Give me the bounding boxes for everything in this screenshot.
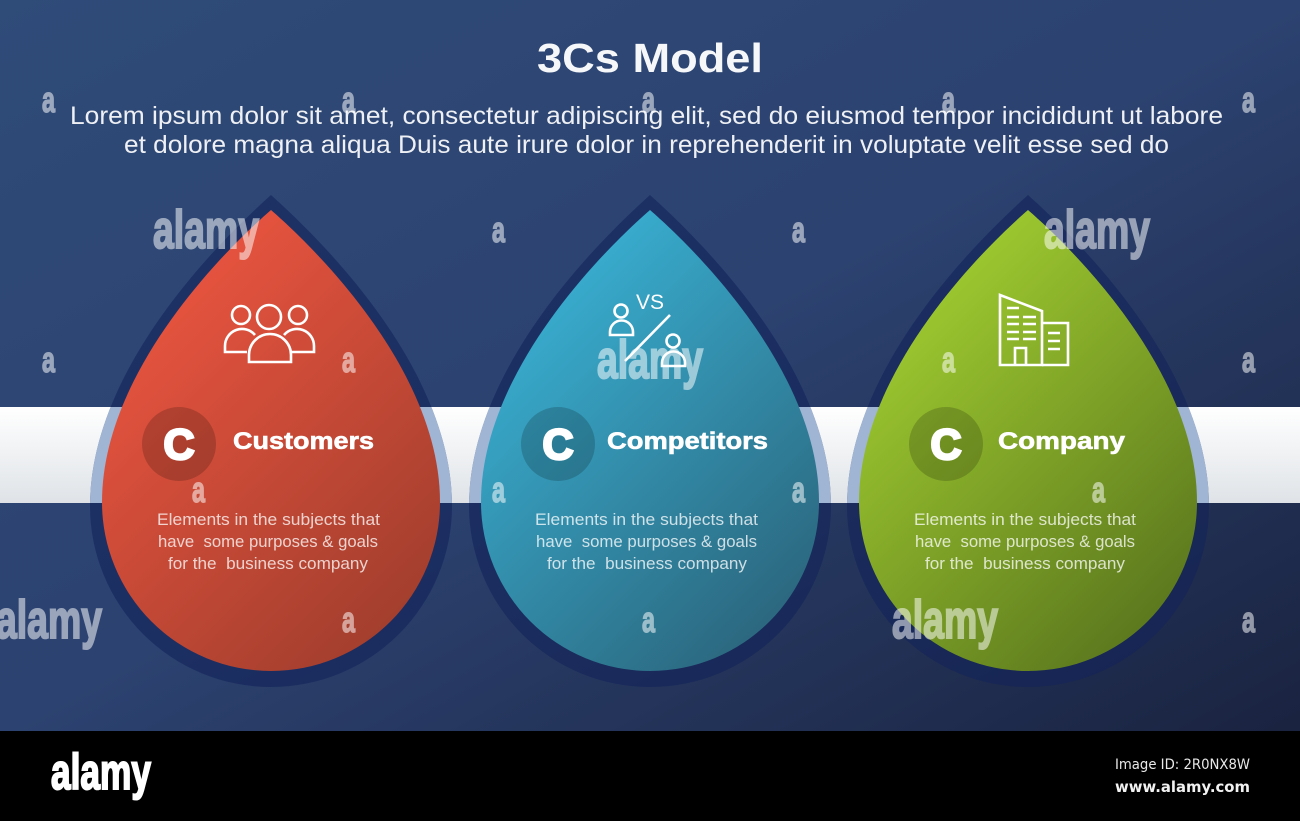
customers description: Elements in the subjects that xyxy=(157,510,380,529)
customers description: have some purposes & goals xyxy=(158,532,378,551)
competitors badge: C xyxy=(542,421,574,469)
footer logo: alamy xyxy=(51,744,151,800)
customers drop xyxy=(102,210,440,671)
customers description: for the business company xyxy=(168,554,368,573)
watermarks: a xyxy=(1092,469,1106,510)
customers label: Customers xyxy=(233,428,374,455)
icon: versus: VS xyxy=(636,291,664,314)
company description xyxy=(914,510,1136,573)
watermarks: a xyxy=(1242,79,1256,120)
competitors description: have some purposes & goals xyxy=(536,532,757,551)
competitors description xyxy=(535,510,758,573)
company label: Company xyxy=(998,428,1126,455)
watermarks: a xyxy=(42,339,56,380)
horizontal white band xyxy=(0,407,1300,503)
watermarks: a xyxy=(492,209,506,250)
competitors ring over band xyxy=(469,407,831,503)
competitors drop outer ring xyxy=(469,195,831,687)
watermarks: a xyxy=(42,79,56,120)
intro text: Lorem ipsum dolor sit amet, consectetur adipiscing elit, sed do eiusmod tempor incididunt ut labore xyxy=(70,102,1223,130)
competitors description: for the business company xyxy=(547,554,747,573)
watermarks: a xyxy=(942,339,956,380)
icon: buildings xyxy=(1000,295,1068,365)
watermarks: alamy xyxy=(1044,200,1150,260)
competitors badge xyxy=(521,407,595,481)
watermarks: a xyxy=(342,79,356,120)
watermarks: a xyxy=(792,209,806,250)
footer bar xyxy=(0,731,1300,821)
watermarks: a xyxy=(1242,339,1256,380)
intro text: et dolore magna aliqua Duis aute irure dolor in reprehenderit in voluptate velit esse sed do xyxy=(124,131,1169,159)
icon: people group xyxy=(225,305,314,362)
competitors label: Competitors xyxy=(607,428,768,455)
intro text xyxy=(70,102,1223,159)
company badge: C xyxy=(930,421,962,469)
customers ring over band xyxy=(90,407,452,503)
watermarks: alamy xyxy=(597,330,703,390)
watermarks: a xyxy=(492,469,506,510)
footer image id xyxy=(1115,757,1250,796)
customers description xyxy=(157,510,380,573)
title: 3Cs Model xyxy=(537,35,763,81)
watermarks: a xyxy=(642,599,656,640)
icon: versus xyxy=(610,291,685,366)
watermarks: a xyxy=(792,469,806,510)
watermarks: a xyxy=(942,79,956,120)
panel: company xyxy=(847,195,1209,687)
customers badge: C xyxy=(163,421,195,469)
customers drop outer ring xyxy=(90,195,452,687)
company badge xyxy=(909,407,983,481)
footer image id: Image ID: 2R0NX8W xyxy=(1115,757,1250,773)
competitors description: Elements in the subjects that xyxy=(535,510,758,529)
watermarks: a xyxy=(342,339,356,380)
competitors drop xyxy=(481,210,819,671)
company drop outer ring xyxy=(847,195,1209,687)
panel: competitors xyxy=(469,195,831,687)
company description: Elements in the subjects that xyxy=(914,510,1136,529)
company description: have some purposes & goals xyxy=(915,532,1135,551)
watermarks: alamy xyxy=(153,200,259,260)
watermarks: a xyxy=(1242,599,1256,640)
company description: for the business company xyxy=(925,554,1125,573)
customers badge xyxy=(142,407,216,481)
watermarks xyxy=(0,79,1256,650)
company drop xyxy=(859,210,1197,671)
watermarks: alamy xyxy=(0,590,102,650)
footer image id: www.alamy.com xyxy=(1115,778,1250,796)
watermarks: alamy xyxy=(892,590,998,650)
company ring over band xyxy=(847,407,1209,503)
watermarks: a xyxy=(342,599,356,640)
panel: customers xyxy=(90,195,452,687)
watermarks: a xyxy=(192,469,206,510)
watermarks: a xyxy=(642,79,656,120)
